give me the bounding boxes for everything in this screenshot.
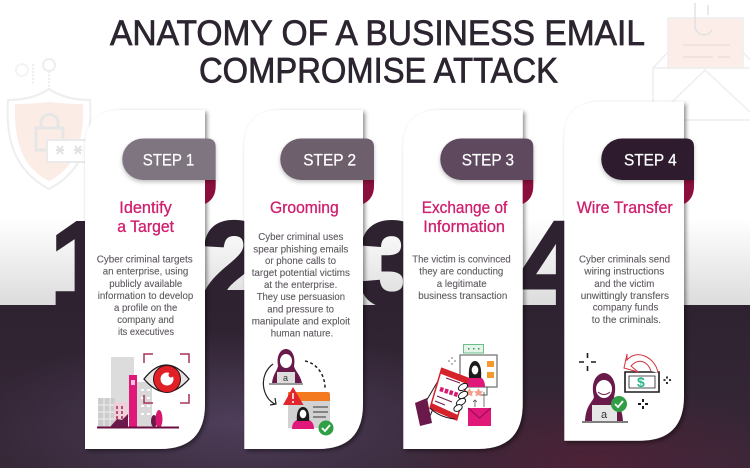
step 3 badge — [440, 138, 533, 204]
heading: Identify a Target — [117, 198, 174, 236]
icon: faded security shield — [8, 59, 93, 189]
icon: hacker receiving wire transfer: $ — [637, 374, 645, 390]
heading: Identify a Target: a Target — [117, 217, 174, 236]
step 2 description: Cyber criminal uses — [258, 231, 343, 243]
step 4 description: unwittingly transfers — [581, 290, 669, 302]
card 1 background — [85, 110, 205, 449]
step 1 description: publicly available — [109, 278, 182, 290]
step 1 description: a profile on the — [114, 302, 177, 314]
icon: city under surveillance eye — [97, 354, 189, 428]
icon: hacker grooming a victim — [263, 349, 334, 436]
step 4 description — [579, 254, 670, 326]
panel: step 1 — [85, 110, 216, 449]
step 2 badge: STEP 2 — [303, 151, 356, 170]
step 2 description: target potential victims — [252, 267, 350, 279]
step 3 description: a legitimate — [437, 278, 487, 290]
step 1 description: company and — [117, 314, 174, 326]
step 2 description: or phone calls to — [265, 255, 336, 267]
step 4 description: and the victim — [594, 278, 655, 290]
step 1 description: its executives — [118, 326, 174, 338]
card 3 background — [403, 110, 523, 449]
title — [110, 14, 645, 90]
title: COMPROMISE ATTACK — [199, 52, 558, 90]
step 2 description: and pressure to — [267, 304, 334, 316]
icon: faded phishing envelope — [653, 3, 750, 120]
large step numbers behind the cards — [50, 197, 585, 331]
step 4 description: company funds — [593, 302, 658, 314]
step 1 description: information to develop — [98, 290, 193, 302]
card 4 background — [564, 102, 684, 441]
step 2 badge — [280, 138, 374, 204]
panel: step 2 — [244, 110, 374, 449]
step 3 description: The victim is convinced — [412, 254, 511, 266]
panel: step 3 — [403, 110, 533, 449]
step 1 badge: STEP 1 — [143, 151, 194, 170]
icon: hacker grooming a victim: a — [283, 373, 288, 383]
heading: Identify a Target: Identify — [119, 198, 172, 217]
step 4 description: Cyber criminals send — [579, 254, 670, 266]
large step numbers behind the cards: 2 — [201, 197, 268, 331]
step 4 description: to the criminals. — [592, 314, 661, 326]
large step numbers behind the cards: 1 — [50, 197, 112, 331]
large step numbers behind the cards: 4 — [518, 197, 585, 331]
heading: Exchange of Information: Exchange of — [422, 198, 508, 217]
icon: hacker receiving wire transfer: a — [601, 409, 608, 421]
step 1 description — [97, 254, 193, 338]
icon: hacker receiving wire transfer — [579, 353, 671, 422]
step 4 badge: STEP 4 — [624, 151, 677, 170]
panel: step 4 — [564, 102, 694, 441]
step 2 description: manipulate and exploit — [252, 316, 350, 328]
step 1 description: Cyber criminal targets — [97, 254, 193, 266]
step 3 description: business transaction — [418, 290, 507, 302]
heading: Grooming: Grooming — [270, 198, 339, 217]
step 2 description: human nature. — [271, 328, 333, 340]
step 4 description: wiring instructions — [583, 266, 664, 278]
title: ANATOMY OF A BUSINESS EMAIL — [110, 14, 645, 53]
large step numbers behind the cards: 3 — [359, 197, 426, 331]
step 3 description: they are conducting — [419, 266, 503, 278]
heading: Exchange of Information — [422, 198, 508, 236]
heading: Wire Transfer: Wire Transfer — [577, 198, 673, 217]
step 3 badge: STEP 3 — [462, 151, 514, 170]
step 1 badge — [122, 138, 216, 204]
step 4 badge — [601, 138, 694, 204]
step 2 description: spear phishing emails — [253, 244, 348, 256]
heading: Exchange of Information: Information — [423, 217, 505, 236]
icon: phone and video call exchange — [415, 344, 497, 426]
step 1 description: an enterprise, using — [103, 266, 188, 278]
card 2 background — [244, 110, 363, 449]
step 2 description: at the enterprise. — [264, 279, 337, 291]
step 2 description: They use persuasion — [257, 291, 345, 303]
step 3 description — [412, 254, 511, 302]
step 2 description — [252, 231, 350, 340]
